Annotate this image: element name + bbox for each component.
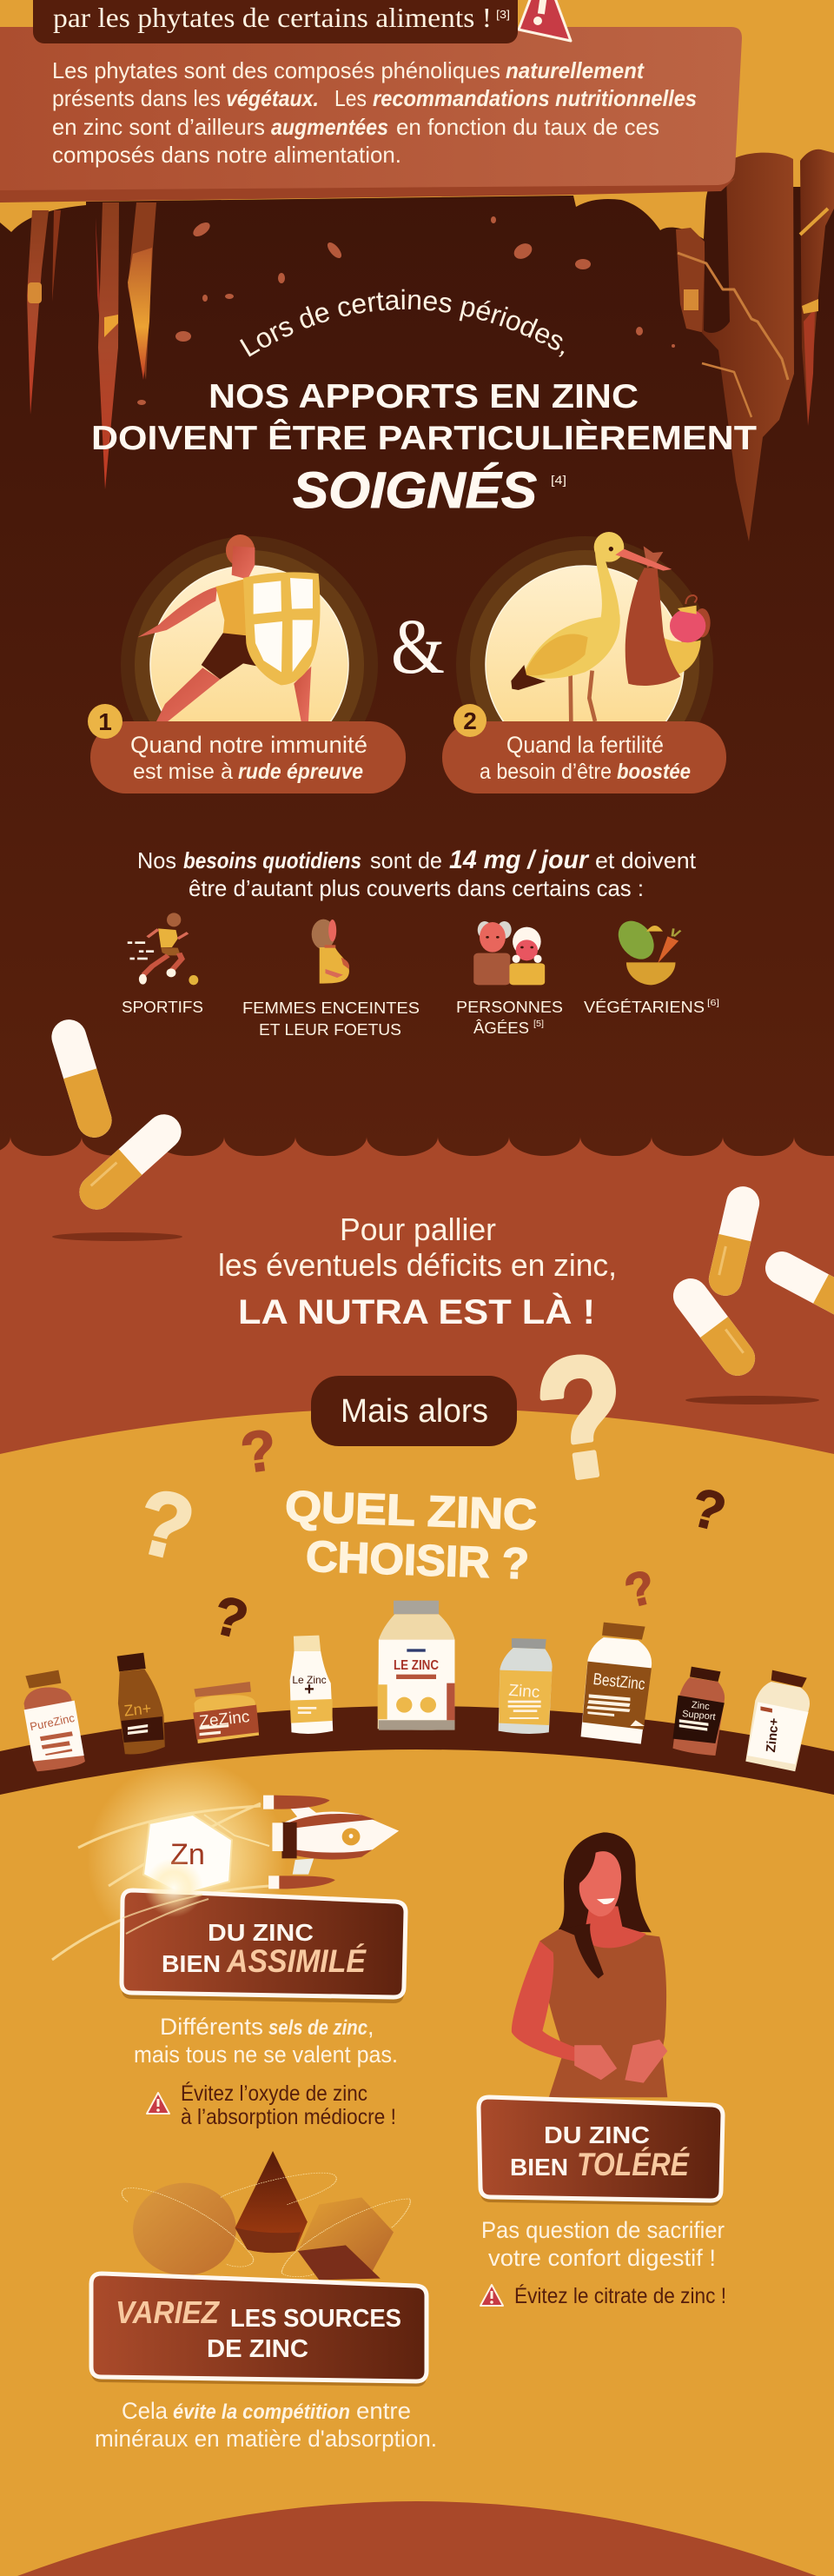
bottle Le Zinc plus: + <box>304 1680 314 1699</box>
badge 2 <box>453 704 486 737</box>
bottle PureZinc: PureZinc <box>29 1711 76 1733</box>
tolere text: Pas question de sacrifier <box>481 2217 725 2243</box>
bottle Zn+ <box>117 1653 165 1755</box>
pill 1: rude épreuve <box>238 760 363 784</box>
main heading: NOS APPORTS EN ZINC <box>208 378 639 415</box>
label: personnes agees <box>456 999 563 1037</box>
big question mark: ? <box>526 1318 639 1518</box>
capsule second left <box>72 1107 189 1217</box>
small question marks: ? <box>208 1585 254 1651</box>
woman illustration <box>512 1832 667 2097</box>
3D shapes illustration <box>122 2151 410 2280</box>
rocket illustration <box>52 1760 399 1960</box>
pill 2: boostée <box>617 760 691 784</box>
pill 2: Quand la fertilité <box>506 732 664 758</box>
badge 2: 2 <box>463 707 477 734</box>
panel body text: composés dans notre alimentation. <box>52 142 401 168</box>
stork figure <box>511 532 711 721</box>
rocket <box>263 1796 399 1889</box>
daily needs text: et doivent <box>595 847 697 873</box>
yellow dome <box>0 1408 834 1738</box>
badge 1: 1 <box>98 708 112 735</box>
variez text: entre <box>356 2398 411 2424</box>
icon: zinc hexagon: Zn <box>170 1838 205 1871</box>
assimile text <box>134 2014 398 2068</box>
label: vegetariens: [6] <box>707 999 719 1008</box>
warrior figure <box>137 534 320 721</box>
label: personnes agees: PERSONNES <box>456 999 563 1016</box>
tag: variez les sources: LES SOURCES <box>230 2305 401 2333</box>
warning: oxyde de zinc: Évitez l’oxyde de zinc <box>181 2081 367 2106</box>
quel zinc heading: QUEL ZINC <box>284 1482 538 1539</box>
arched intro text: Lors de certaines périodes, <box>240 289 565 357</box>
badge 1 <box>88 704 122 739</box>
bottle Le Zinc plus: Le Zinc <box>292 1674 327 1686</box>
pill 2: a besoin d’être <box>480 760 612 784</box>
label: personnes agees: [5] <box>533 1019 544 1029</box>
cave background <box>0 187 834 1156</box>
bottom rust dome <box>17 2501 817 2576</box>
panel body text: Les phytates sont des composés phénoliques <box>52 57 500 83</box>
daily needs text <box>137 846 697 901</box>
variez text: Cela <box>122 2398 169 2424</box>
floating rock fragments <box>137 216 675 405</box>
ampersand: & <box>391 604 445 690</box>
label: personnes agees: ÂGÉES <box>473 1019 529 1037</box>
nutra text: LA NUTRA EST LÀ ! <box>238 1292 595 1331</box>
variez text <box>95 2398 437 2452</box>
daily needs text: 14 mg / jour <box>449 846 590 874</box>
capsule top left <box>47 1015 116 1142</box>
pill 1: est mise à <box>133 760 233 784</box>
label: vegetariens: VÉGÉTARIENS <box>584 999 705 1016</box>
daily needs text: Nos <box>137 847 176 873</box>
capsule right one <box>705 1183 763 1299</box>
bottle Zinc Support: Zinc <box>691 1700 711 1712</box>
variez text: évite la compétition <box>173 2400 350 2424</box>
daily needs text: être d’autant plus couverts dans certains cas : <box>189 875 644 901</box>
tag: du zinc bien assimile: BIEN <box>162 1950 221 1977</box>
pill 1 <box>88 704 406 793</box>
label: femmes enceintes: FEMMES ENCEINTES <box>242 999 420 1017</box>
label: femmes enceintes <box>242 999 420 1039</box>
tag: du zinc bien assimile <box>122 1858 406 2003</box>
bottle Zinc <box>499 1638 553 1734</box>
quel zinc heading <box>284 1482 538 1588</box>
tag: du zinc bien tolere: TOLÉRÉ <box>577 2147 690 2182</box>
panel body text: en zinc sont d’ailleurs <box>52 114 265 140</box>
icon: warning triangle top <box>519 0 571 41</box>
capsule right three <box>666 1271 762 1383</box>
bottle ZeZinc: ZeZinc <box>198 1708 250 1731</box>
small question marks: ? <box>685 1477 731 1544</box>
tag: du zinc bien tolere: DU ZINC <box>544 2121 650 2148</box>
bottle Zinc: Zinc <box>508 1682 540 1702</box>
main heading: SOIGNÉS <box>293 462 537 519</box>
panel body text: Les <box>334 85 367 111</box>
rocket glow over tag <box>122 1858 208 1934</box>
bottle PureZinc <box>24 1670 85 1771</box>
mais alors button <box>311 1376 517 1446</box>
small question marks: ? <box>619 1560 660 1618</box>
mais alors button: Mais alors <box>341 1393 488 1430</box>
bottle BestZinc: BestZinc <box>592 1670 646 1694</box>
circle illustration: warrior <box>121 534 378 793</box>
bottle LE ZINC <box>378 1601 454 1730</box>
capsule shadow left <box>52 1232 182 1241</box>
tag: du zinc bien tolere <box>479 2097 723 2206</box>
nutra text <box>218 1212 617 1331</box>
small question marks <box>128 1417 731 1651</box>
nutra text: les éventuels déficits en zinc, <box>218 1247 617 1283</box>
bottle BestZinc <box>581 1623 652 1744</box>
assimile text: mais tous ne se valent pas. <box>134 2042 398 2068</box>
icon: elderly couple <box>473 921 545 985</box>
icon: zinc hexagon <box>143 1815 269 1895</box>
assimile text: sels de zinc <box>268 2016 367 2040</box>
bottles row <box>24 1601 810 1771</box>
icon: vegetables bowl <box>612 918 680 985</box>
panel body text: recommandations nutritionnelles <box>373 85 697 111</box>
bottle LE ZINC: LE ZINC <box>394 1658 439 1673</box>
small question marks: ? <box>237 1417 281 1485</box>
panel body text: en fonction du taux de ces <box>396 114 659 140</box>
warning: oxyde de zinc: à l’absorption médiocre ! <box>181 2105 396 2129</box>
circle illustration: stork <box>456 532 713 793</box>
phytates text panel <box>0 27 742 202</box>
panel body text: augmentées <box>271 114 388 140</box>
tolere text <box>481 2217 725 2271</box>
tag: variez les sources <box>91 2274 427 2387</box>
rust band background <box>0 1130 834 1495</box>
tag: variez les sources: VARIEZ <box>116 2294 221 2330</box>
icon: pregnant woman <box>312 920 349 984</box>
pill 2 <box>442 704 726 793</box>
label: sportifs: SPORTIFS <box>122 999 203 1016</box>
nutra text: Pour pallier <box>340 1212 496 1247</box>
panel body text <box>52 57 697 168</box>
assimile text: Différents <box>160 2014 263 2040</box>
tag: du zinc bien assimile: DU ZINC <box>208 1919 314 1946</box>
bottle Zinc Support: Support <box>682 1709 716 1723</box>
variez text: minéraux en matière d'absorption. <box>95 2426 437 2452</box>
tag: du zinc bien tolere: BIEN <box>510 2154 568 2181</box>
panel body text: végétaux. <box>226 85 319 111</box>
small question marks: ? <box>128 1468 203 1581</box>
bottle Zinc Support <box>672 1667 725 1756</box>
tag: variez les sources: DE ZINC <box>207 2335 308 2363</box>
daily needs text: besoins quotidiens <box>183 847 361 873</box>
right rock columns with lava cracks <box>676 149 834 541</box>
pill 1: Quand notre immunité <box>130 732 367 758</box>
bottle Zn+: Zn+ <box>123 1699 152 1720</box>
main heading: [4] <box>551 473 566 487</box>
main heading <box>91 378 757 519</box>
bottle ZeZinc <box>193 1682 259 1743</box>
icon: runner <box>128 913 198 985</box>
warning: oxyde de zinc <box>147 2081 396 2129</box>
tag: du zinc bien assimile: ASSIMILÉ <box>226 1943 367 1979</box>
glow and streaks <box>52 1760 287 1960</box>
daily needs text: sont de <box>370 847 442 873</box>
panel body text: présents dans les <box>52 85 221 111</box>
bottle Zinc plus: Zinc+ <box>764 1717 782 1753</box>
warning: citrate de zinc: Évitez le citrate de zinc ! <box>514 2283 726 2308</box>
tolere text: votre confort digestif ! <box>488 2245 716 2271</box>
icon: warning triangle <box>480 2285 503 2306</box>
panel body text: naturellement <box>506 57 645 83</box>
capsule shadow right <box>685 1396 819 1404</box>
label: femmes enceintes: ET LEUR FOETUS <box>259 1021 401 1039</box>
assimile text: , <box>367 2014 374 2040</box>
left stalactites <box>27 202 156 489</box>
phytates heading: par les phytates de certains aliments ! <box>53 2 492 33</box>
capsule right two <box>759 1245 834 1332</box>
shelf arc <box>0 1706 834 1795</box>
icon: warning triangle <box>147 2093 169 2114</box>
phytates heading: [3] <box>496 8 510 21</box>
bottle Le Zinc plus <box>290 1636 333 1734</box>
bottle Zinc plus <box>745 1670 810 1771</box>
main heading: DOIVENT ÊTRE PARTICULIÈREMENT <box>91 419 757 457</box>
quel zinc heading: CHOISIR ? <box>305 1532 530 1588</box>
phytates heading <box>33 0 518 43</box>
